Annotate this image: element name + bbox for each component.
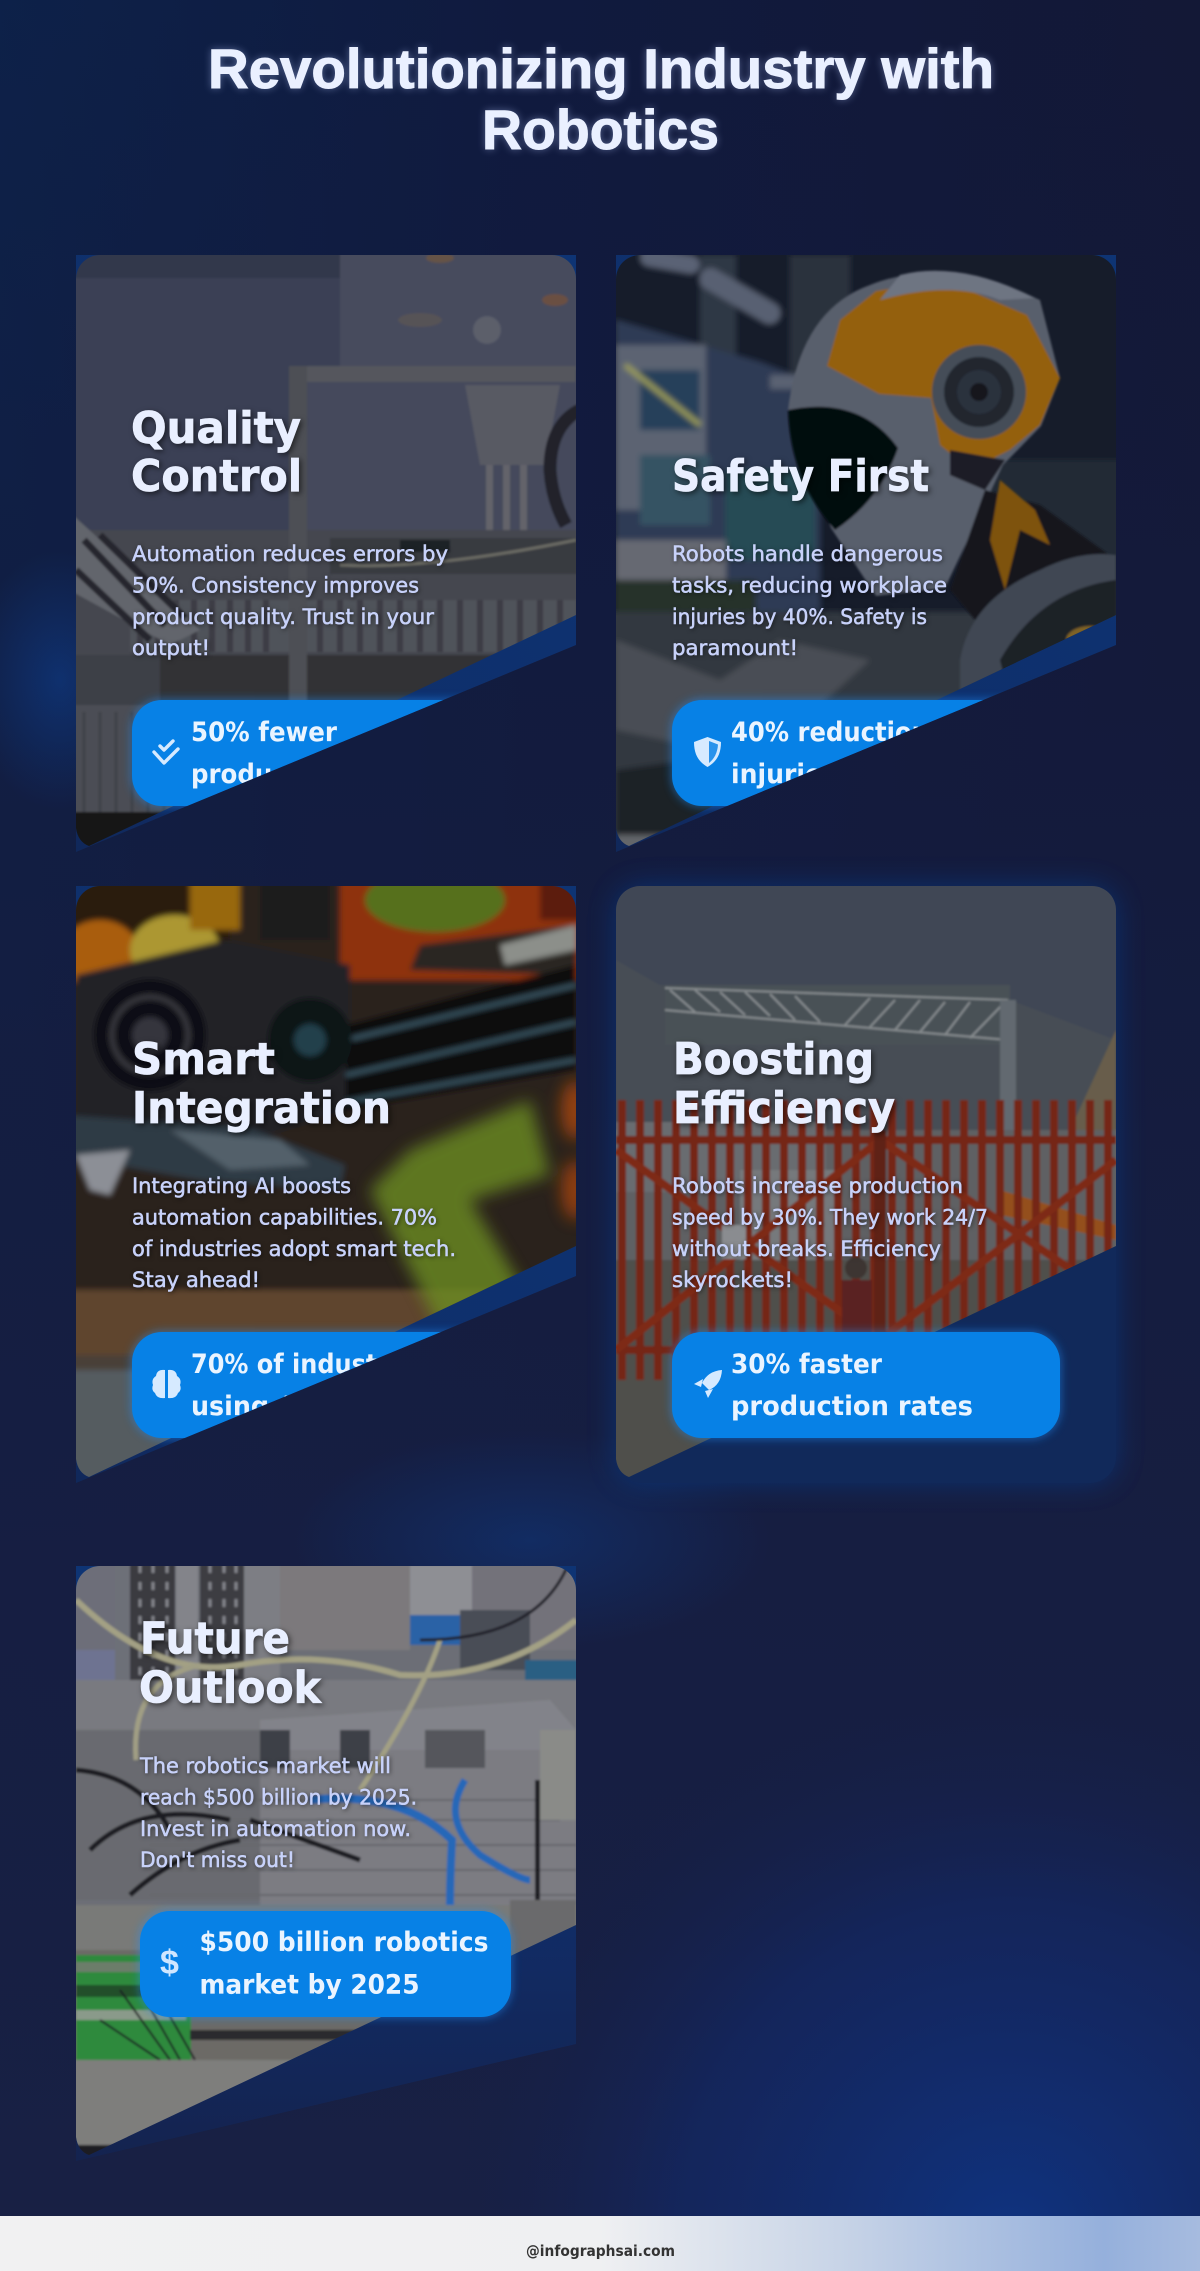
body text: Don't miss out! [140, 1848, 295, 1872]
icon: dollar: $ [160, 1944, 179, 1982]
heading: Safety First [672, 451, 929, 502]
heading [139, 1614, 323, 1714]
card glow [616, 886, 1116, 1483]
heading: Smart [132, 1034, 275, 1085]
body text [139, 1754, 417, 1872]
panel: smart integration [60, 868, 590, 1500]
title: Robotics [482, 98, 719, 161]
stat pill: $500 billion robotics [200, 1927, 488, 1958]
panel: safety first [600, 240, 1130, 870]
footer handle: @infographsai.com [526, 2242, 675, 2260]
stat pill: 30% faster [731, 1349, 883, 1380]
body text: Automation reduces errors by [132, 542, 448, 566]
body text: without breaks. Efficiency [672, 1237, 941, 1261]
title [208, 37, 994, 161]
body text: product quality. Trust in your [132, 605, 434, 629]
photo: 3D printer [60, 868, 590, 1500]
body text: automation capabilities. 70% [132, 1206, 437, 1230]
photo: red gate at factory [600, 870, 1130, 1500]
card background [76, 255, 576, 852]
title: Revolutionizing Industry with [208, 37, 994, 100]
icon: rocket [694, 1370, 722, 1398]
stat pill [672, 700, 1060, 806]
body text [132, 1174, 456, 1292]
heading [132, 410, 304, 496]
body text [132, 542, 448, 660]
stat pill: injuries [731, 759, 837, 790]
footer [0, 2216, 1200, 2271]
body text: speed by 30%. They work 24/7 [672, 1206, 988, 1230]
stat pill: market by 2025 [200, 1970, 420, 2000]
body text: Invest in automation now. [140, 1817, 411, 1841]
body text: Robots increase production [672, 1174, 963, 1198]
card background [76, 1566, 576, 2161]
body text: The robotics market will [139, 1754, 391, 1778]
body text: Stay ahead! [132, 1268, 260, 1292]
body text: of industries adopt smart tech. [132, 1237, 456, 1261]
stat pill: 70% of industries [191, 1349, 428, 1380]
icon: double check [154, 741, 178, 763]
body text [672, 1174, 988, 1292]
panel: quality control [76, 255, 576, 852]
stat pill: 50% fewer [191, 717, 338, 748]
heading: Efficiency [673, 1083, 895, 1134]
body text: Integrating AI boosts [132, 1174, 351, 1198]
heading: Control [131, 451, 302, 502]
heading: Future [140, 1614, 290, 1664]
photo: pneumatic automation panel [60, 1550, 590, 2180]
body text: tasks, reducing workplace [672, 574, 947, 598]
body text: output! [132, 636, 210, 660]
icon: shield [694, 737, 721, 767]
heading [673, 1034, 895, 1134]
icon: brain [152, 1370, 181, 1398]
body text: injuries by 40%. Safety is [672, 605, 927, 629]
stat pill [672, 1332, 1060, 1438]
body text: skyrockets! [672, 1268, 793, 1292]
heading: Boosting [673, 1034, 874, 1085]
body text: Robots handle dangerous [672, 542, 943, 566]
heading: Quality [131, 403, 301, 454]
stat pill: 40% reduction in [731, 717, 963, 748]
photo: factory conveyor machine [76, 255, 576, 846]
card background [76, 886, 576, 1483]
card background [616, 886, 1116, 1483]
stat pill: product defects [191, 759, 409, 790]
panel: future outlook [60, 1550, 590, 2180]
stat pill: using AI [191, 1391, 307, 1422]
body text: 50%. Consistency improves [132, 574, 419, 598]
body text [672, 542, 947, 660]
body text: reach $500 billion by 2025. [140, 1786, 417, 1810]
stat pill [132, 1332, 520, 1438]
stat pill: production rates [731, 1391, 973, 1422]
heading: Outlook [139, 1662, 323, 1714]
stat pill [132, 700, 520, 806]
heading: Integration [132, 1083, 391, 1134]
card background [616, 255, 1116, 852]
heading [132, 1034, 391, 1134]
panel: boosting efficiency [600, 870, 1130, 1500]
stat pill [140, 1911, 511, 2017]
body text: paramount! [672, 636, 798, 660]
photo: humanoid robot [600, 240, 1130, 870]
